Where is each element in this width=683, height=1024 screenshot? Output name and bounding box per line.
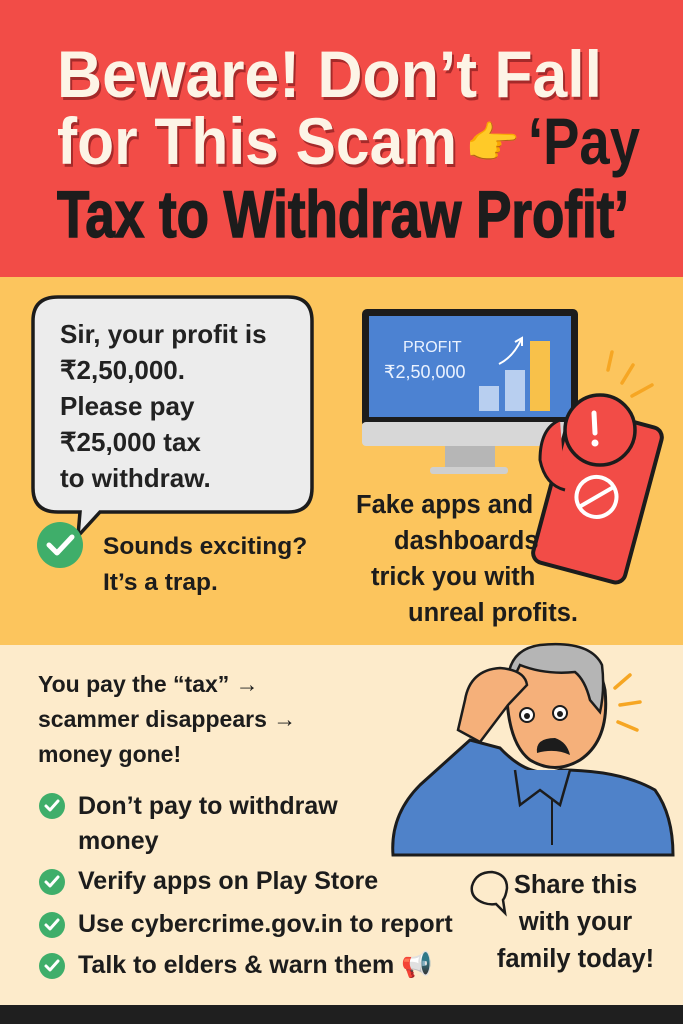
bubble text: Please pay <box>60 391 194 421</box>
bubble text: ₹25,000 tax <box>60 427 201 457</box>
title: for This Scam <box>59 107 459 181</box>
monitor and phone illustration: PROFIT <box>403 339 462 356</box>
header panel <box>0 0 683 277</box>
fake apps text: Fake apps and <box>356 491 533 519</box>
trap text: Sounds exciting? <box>103 533 307 560</box>
fake apps text <box>356 491 578 627</box>
bubble text: Sir, your profit is <box>60 319 267 349</box>
monitor and phone illustration: ₹2,50,000 <box>384 362 466 382</box>
scam flow text <box>38 671 296 767</box>
fake apps text: trick you with <box>371 563 535 591</box>
share text <box>497 871 654 973</box>
bubble text: to withdraw. <box>60 463 211 493</box>
bubble text <box>60 319 267 493</box>
cream panel <box>0 645 683 1005</box>
scam flow text: scammer disappears → <box>38 706 296 732</box>
fake apps text: dashboards <box>394 527 539 555</box>
checklist: Verify apps on Play Store <box>78 867 378 895</box>
share text: with your <box>519 908 632 936</box>
title: ‘Pay <box>528 104 640 178</box>
footer bar <box>0 1005 683 1024</box>
checklist: Use cybercrime.gov.in to report <box>78 910 453 938</box>
trap text <box>103 533 307 596</box>
yellow panel <box>0 277 683 645</box>
title: Beware! Don’t Fall <box>57 37 602 111</box>
checklist: money <box>78 827 159 855</box>
fake apps text: unreal profits. <box>408 599 578 627</box>
title: 👉 <box>465 119 520 168</box>
bubble text: ₹2,50,000. <box>60 355 185 385</box>
title <box>57 37 640 251</box>
title: Beware! Don’t Fall <box>59 40 604 114</box>
share text: Share this <box>514 871 637 899</box>
checklist: Don’t pay to withdraw <box>78 792 338 820</box>
title: for This Scam <box>57 104 457 178</box>
checklist <box>39 792 453 979</box>
trap text: It’s a trap. <box>103 569 218 596</box>
checklist: Talk to elders & warn them 📢 <box>78 951 432 979</box>
scam flow text: money gone! <box>38 741 181 767</box>
scam flow text: You pay the “tax” → <box>38 671 259 697</box>
share text: family today! <box>497 945 654 973</box>
